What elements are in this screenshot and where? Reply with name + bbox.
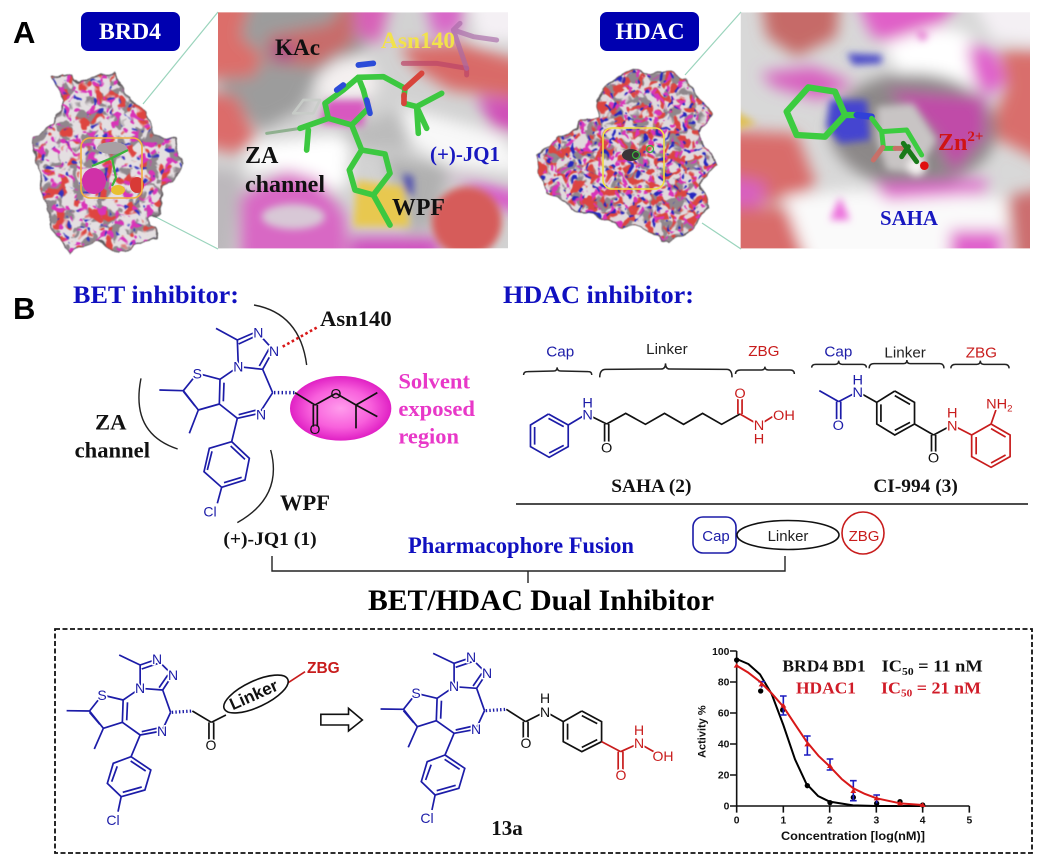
red curve: HDAC1 (737, 666, 923, 805)
structure: JQ1 linker design: N (168, 667, 178, 683)
faint residue sticks (267, 23, 497, 133)
structure: compound 13a: H (634, 722, 644, 738)
structure: compound 13a: N (482, 665, 492, 681)
red data markers (734, 663, 926, 807)
legend: HDAC1 IC50: HDAC1 (796, 678, 856, 697)
Asn140 hydrogen bond (283, 327, 318, 347)
binding region arcs (139, 305, 307, 523)
divider line (516, 503, 1028, 505)
panel: dashed design box (55, 629, 1032, 853)
SAHA and CI-994 atom labels: O (833, 418, 844, 434)
fusion bracket (272, 556, 785, 583)
label: SAHA: SAHA (880, 206, 939, 230)
label: ZA channel region: channel (75, 438, 150, 463)
SAHA linker bonds (587, 413, 740, 442)
label: ZA channel: channel (245, 172, 325, 198)
compound name: 13a: 13a (491, 816, 523, 840)
ligand: JQ1 sticks (300, 63, 442, 225)
structure: JQ1 linker design: O (206, 737, 217, 753)
structure: compound 13a: N (471, 721, 481, 737)
legend: HDAC1 IC50: IC (881, 678, 900, 697)
label: Asn140: Asn140 (381, 28, 455, 53)
panel: HDAC binding pocket close-up (740, 12, 1030, 248)
structure: compound 13a: O (521, 735, 532, 751)
atom labels: N (253, 325, 263, 341)
legend: HDAC1 IC50: = 21 nM (912, 678, 981, 697)
axis tick labels: 0 (734, 815, 740, 826)
SAHA and CI-994 atom labels: H (582, 396, 593, 411)
ester oxygens: O (310, 421, 321, 437)
structure: (+)-JQ1 with binding regions (75, 305, 475, 550)
badge: HDAC: HDAC (616, 19, 684, 44)
structure: compound 13a: N (466, 649, 476, 665)
SAHA and CI-994 atom labels: O (734, 386, 746, 402)
structure: JQ1 linker design: Cl (106, 812, 120, 828)
SAHA red ZBG bonds (738, 398, 774, 425)
label: solvent exposed region: Solvent (398, 368, 470, 393)
axis tick labels: 40 (718, 740, 730, 751)
axis tick labels: 1 (780, 815, 786, 826)
label: solvent exposed region: exposed (398, 396, 475, 421)
compound name: (+)-JQ1 (1): (+)-JQ1 (1) (223, 529, 317, 550)
hash bond (274, 391, 295, 394)
axis tick labels: 80 (718, 678, 730, 689)
structure: compound 13a: N (449, 678, 459, 694)
axis tick labels: 5 (966, 815, 972, 826)
connector lines: BRD4 zoom (143, 12, 218, 249)
badge: BRD4 (81, 12, 180, 51)
structure: compound 13a: Cl (420, 810, 434, 826)
structure: compound 13a (381, 649, 674, 840)
legend: HDAC1 IC50: 50 (901, 689, 912, 700)
pharmacophore schematic: Cap, Linker, ZBG: ZBG (849, 528, 879, 545)
main title: BET/HDAC Dual Inhibitor (368, 584, 714, 617)
structure: JQ1 linker design: N (157, 723, 167, 739)
panel: BRD4 binding pocket close-up (218, 12, 508, 248)
SAHA and CI-994 atom labels: OH (773, 408, 795, 424)
structure: compound 13a: O (616, 767, 627, 783)
bracket group labels: ZBG (748, 343, 780, 360)
black curve: BRD4 BD1 (737, 659, 923, 806)
axis tick labels: 3 (873, 815, 879, 826)
legend: BRD4 BD1 IC50: IC (882, 657, 901, 676)
SAHA and CI-994 atom labels: NH (986, 397, 1007, 413)
structures: SAHA and CI-994 with pharmacophore brackets (524, 341, 1013, 497)
legend: BRD4 BD1 IC50 (782, 657, 983, 678)
atom labels: Cl (203, 504, 217, 520)
protein surface: HDAC (535, 70, 715, 243)
structure: JQ1 linker design: Linker (227, 676, 281, 714)
ester oxygens: O (331, 385, 342, 401)
panel label B: B (13, 291, 35, 326)
brackets above SAHA and CI-994 (524, 360, 1009, 377)
label: Zn2+: Zn (938, 130, 967, 156)
axis tick labels: 100 (712, 647, 730, 658)
SAHA and CI-994 atom labels: 2 (1007, 403, 1013, 414)
pharmacophore schematic: Cap, Linker, ZBG: Cap (702, 528, 730, 545)
CI-994 blue cap bonds (819, 391, 858, 419)
bracket group labels: Cap (546, 344, 574, 361)
legend: BRD4 BD1 IC50: 50 (902, 667, 914, 678)
SAHA and CI-994 atom labels: N (582, 408, 593, 423)
blue error bars (758, 682, 880, 803)
axis tick labels: 20 (718, 771, 730, 782)
solvent exposed region ellipse (290, 376, 391, 441)
label: Asn140 target: Asn140 (320, 306, 392, 331)
atom labels (193, 325, 279, 520)
connector lines: HDAC zoom (685, 12, 741, 249)
SAHA and CI-994 atom labels (582, 373, 1013, 467)
label: (+)-JQ1: (+)-JQ1 (430, 142, 500, 166)
SAHA and CI-994 atom labels: H (947, 406, 958, 422)
heading: BET inhibitor: BET inhibitor: (73, 280, 239, 309)
label: solvent exposed region: region (398, 423, 459, 448)
pharmacophore fusion heading: Pharmacophore Fusion (408, 533, 634, 558)
SAHA and CI-994 atom labels: O (601, 441, 612, 457)
SAHA and CI-994 atom labels: N (852, 385, 863, 401)
compound name: CI-994 (3): CI-994 (3) (873, 476, 958, 497)
arrow: design to compound (321, 708, 362, 731)
atom labels: S (193, 365, 202, 381)
SAHA blue cap bonds (530, 414, 587, 457)
legend: BRD4 BD1 IC50: BRD4 BD1 (782, 657, 866, 676)
label: WPF: WPF (392, 195, 445, 221)
bracket group labels: Cap (824, 344, 852, 361)
panel label A: A (13, 15, 35, 50)
ligand: SAHA sticks (787, 87, 922, 162)
y axis title: Activity % (696, 705, 708, 758)
bracket group labels: Linker (884, 345, 926, 362)
pharmacophore schematic: Cap, Linker, ZBG: Linker (768, 528, 808, 545)
axis tick labels (712, 647, 972, 826)
axis tick labels: 0 (724, 802, 730, 813)
structure: JQ1 linker design: N (152, 651, 162, 667)
SAHA and CI-994 atom labels: N (754, 418, 764, 434)
structure: compound 13a: S (411, 685, 421, 701)
heading: HDAC inhibitor: HDAC inhibitor: (503, 280, 694, 309)
ester oxygens (310, 385, 342, 437)
compound name: SAHA (2): SAHA (2) (611, 476, 691, 497)
bracket group labels (546, 341, 997, 362)
chart: activity dose-response curves (696, 647, 983, 843)
axes and ticks (730, 651, 969, 813)
x axis title: Concentration [log(nM)] (781, 830, 925, 843)
bracket group labels: Linker (646, 341, 688, 358)
label: ZA channel: ZA (245, 143, 279, 169)
badge: HDAC (600, 12, 699, 51)
structure: compound 13a: N (634, 735, 644, 751)
legend: HDAC1 IC50 (796, 678, 981, 700)
black data points (734, 657, 925, 808)
axis tick labels: 60 (718, 709, 730, 720)
structure: JQ1 linker design: N (135, 680, 145, 696)
structure: JQ1 linker design (67, 651, 340, 828)
structure: JQ1 linker design: ZBG (307, 660, 340, 677)
protein surface: BRD4 (34, 73, 184, 253)
label: ZA channel region: ZA (95, 409, 127, 434)
atom labels: N (256, 406, 266, 422)
label: Zn2+: 2+ (967, 129, 983, 145)
zinc ion (920, 161, 929, 170)
axis tick labels: 2 (827, 815, 833, 826)
structure: JQ1 linker design: S (97, 687, 107, 703)
SAHA and CI-994 atom labels: N (947, 419, 958, 434)
CI-994 red ZBG bonds (952, 410, 1010, 467)
CI-994 linker bonds (858, 391, 952, 452)
tert-butyl ester bonds (295, 393, 377, 428)
pharmacophore schematic: Cap, Linker, ZBG (693, 512, 884, 554)
legend: BRD4 BD1 IC50: = 11 nM (914, 657, 983, 676)
structure: compound 13a: OH (652, 748, 674, 764)
atom labels: N (269, 343, 279, 359)
badge: BRD4: BRD4 (99, 19, 162, 44)
bracket group labels: ZBG (966, 345, 997, 361)
SAHA and CI-994 atom labels: O (928, 451, 939, 467)
SAHA and CI-994 atom labels: H (754, 432, 764, 447)
label: WPF region: WPF (280, 490, 330, 515)
SAHA and CI-994 atom labels: H (852, 373, 863, 388)
axis tick labels: 4 (920, 815, 926, 826)
label: KAc: KAc (275, 35, 320, 60)
structure: compound 13a: N (540, 704, 550, 720)
blue scaffold bonds (159, 328, 273, 503)
atom labels: N (233, 359, 243, 375)
structure: compound 13a: H (540, 690, 550, 706)
